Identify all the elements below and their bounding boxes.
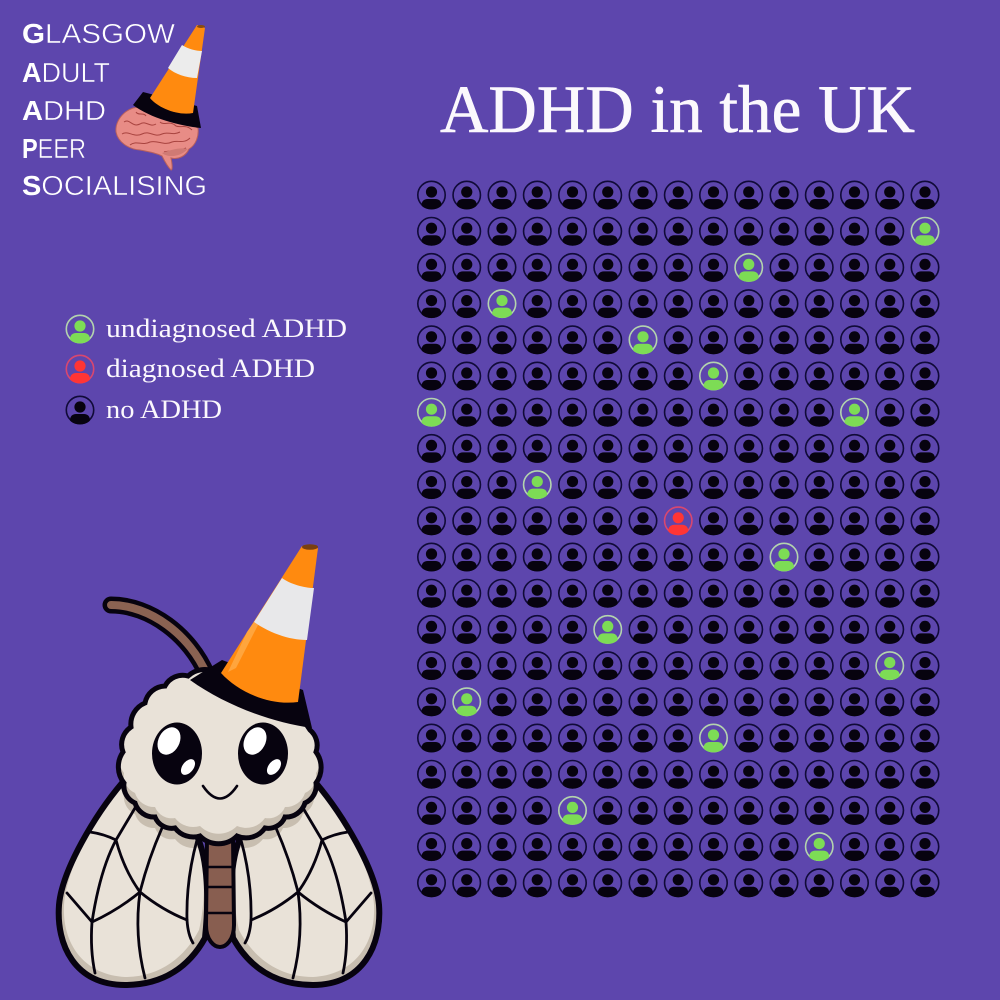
pictogram grid: 300 people: [416, 181, 941, 897]
legend: undiagnosed ADHD: undiagnosed ADHD: [106, 314, 347, 343]
legend: no ADHD: no ADHD: [106, 395, 222, 424]
legend: no ADHD: [66, 395, 222, 424]
legend: [64, 313, 347, 424]
moth traffic cone: [190, 544, 318, 728]
logo wordmark: SOCIALISING: [22, 170, 207, 201]
right eye: [238, 722, 288, 784]
legend: diagnosed ADHD: [64, 353, 315, 385]
right wing: [117, 681, 379, 985]
legend: undiagnosed ADHD: [64, 313, 347, 345]
left wing: [59, 681, 321, 985]
moth mascot with traffic cone: [59, 544, 379, 985]
moth body: [206, 835, 234, 947]
logo wordmark: GLASGOW: [22, 18, 176, 49]
legend: diagnosed ADHD: diagnosed ADHD: [106, 354, 315, 383]
logo wordmark: ADULT: [22, 57, 110, 88]
title: ADHD in the UK: [440, 71, 915, 147]
logo wordmark: [22, 18, 207, 201]
antenna: [111, 605, 207, 675]
head fluff: [118, 660, 321, 844]
icon: logo traffic cone: [133, 25, 205, 128]
icon: brain: [116, 105, 198, 170]
logo wordmark: ADHD: [22, 95, 106, 126]
logo wordmark: PEER: [22, 133, 86, 164]
smile: [203, 786, 237, 798]
left eye: [152, 722, 202, 784]
logo: Glasgow Adult ADHD Peer Socialising: [22, 18, 207, 201]
